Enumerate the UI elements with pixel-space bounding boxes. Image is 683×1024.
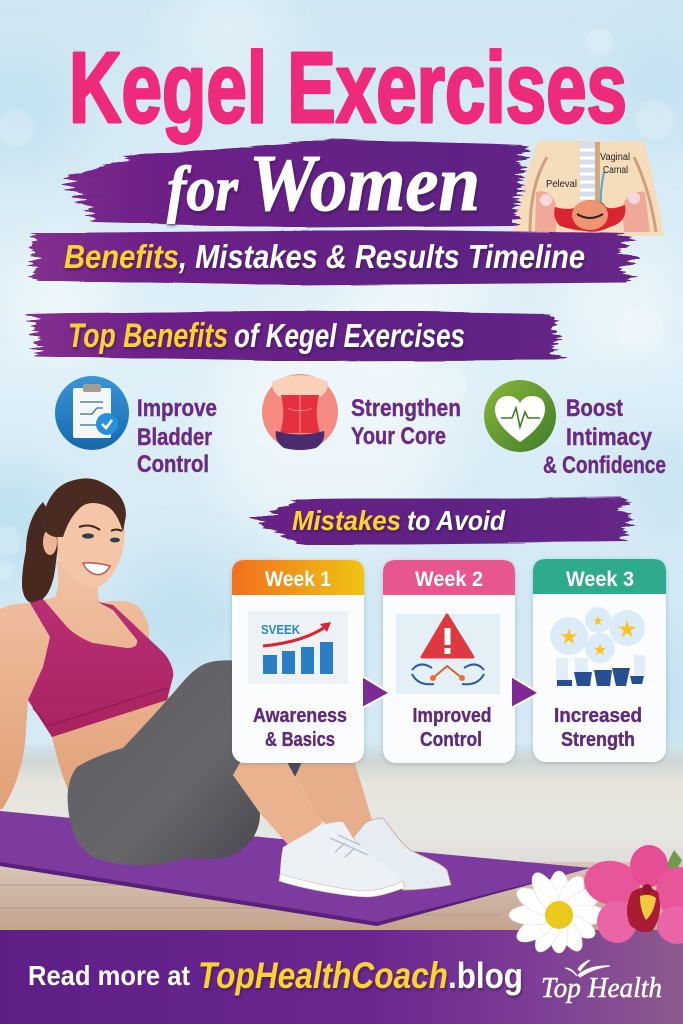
stars icon: ★ xyxy=(617,617,637,643)
card: week 3: Increased xyxy=(554,705,642,727)
card: week 3 xyxy=(533,559,666,762)
banner: subtitle: , Mistakes & Results Timeline xyxy=(178,238,585,275)
anatomy illustration xyxy=(512,141,664,236)
card: week 2 xyxy=(383,560,515,763)
text: Your Core xyxy=(351,423,446,450)
heading: mistakes: Mistakes xyxy=(292,505,401,536)
eyes and brows xyxy=(79,526,122,531)
woman xyxy=(0,478,451,897)
beach horizon and sand xyxy=(0,745,683,875)
heading: top benefits xyxy=(34,310,556,361)
arrow: week 2 to 3 xyxy=(511,676,539,708)
flowers xyxy=(509,845,683,956)
card: week 3: Week 3 xyxy=(566,568,634,591)
warning icon xyxy=(396,614,500,694)
heading: top benefits: of Kegel Exercises xyxy=(234,317,465,354)
anatomy illustration: Vaginal xyxy=(600,152,630,163)
footer link text: Read more at xyxy=(28,960,190,991)
banner: subtitle xyxy=(32,230,630,286)
icon: heart xyxy=(484,380,556,452)
icon: clipboard xyxy=(55,376,129,450)
logo xyxy=(541,960,662,1004)
text xyxy=(543,395,666,479)
card: week 2: Improved xyxy=(412,705,492,727)
footer link text: TopHealthCoach xyxy=(198,955,448,996)
text xyxy=(351,395,461,450)
stars icon: ★ xyxy=(592,614,604,629)
chart icon xyxy=(248,611,348,684)
arrow: week 1 to 2 xyxy=(362,676,390,708)
daisy xyxy=(509,868,607,956)
shoe back xyxy=(353,818,451,890)
card: week 1: & Basics xyxy=(265,729,335,751)
text: Improve xyxy=(137,395,217,422)
ponytail xyxy=(22,502,60,603)
smile xyxy=(83,563,110,575)
card: week 1: Week 1 xyxy=(265,568,331,591)
text: Intimacy xyxy=(566,424,653,451)
face xyxy=(57,502,124,587)
wooden floor xyxy=(0,862,683,934)
chart icon: SVEEK xyxy=(261,622,301,637)
text: Boost xyxy=(566,395,623,422)
icon: torso xyxy=(262,374,338,450)
banner: for Women: Women xyxy=(249,140,480,228)
front calf xyxy=(233,763,322,847)
stars icon: ★ xyxy=(559,625,579,650)
banner: subtitle: Benefits xyxy=(64,238,179,275)
heading: mistakes: to Avoid xyxy=(407,505,506,536)
card: week 2: Week 2 xyxy=(415,568,483,591)
stars icon xyxy=(550,607,645,686)
back leg xyxy=(286,760,372,840)
text: Strengthen xyxy=(351,395,461,422)
banner: for Women xyxy=(66,139,526,228)
weekly timeline xyxy=(232,559,666,763)
shoe front xyxy=(280,822,403,897)
text: Control xyxy=(137,451,209,478)
anatomy illustration: Carnal xyxy=(603,165,628,176)
card: week 3: Strength xyxy=(561,729,635,751)
text: Bladder xyxy=(137,424,212,451)
hair xyxy=(42,478,126,537)
card: week 1: Awareness xyxy=(253,705,347,727)
footer link text: .blog xyxy=(448,955,523,996)
text xyxy=(137,395,217,478)
pink sports top xyxy=(28,599,173,737)
orchid xyxy=(581,845,683,944)
benefit: core xyxy=(262,374,461,450)
arm and torso xyxy=(0,560,170,810)
stars icon: ★ xyxy=(593,640,607,659)
heading: mistakes xyxy=(254,497,630,545)
yoga mat xyxy=(0,811,590,926)
heading: top benefits: Top Benefits xyxy=(68,317,228,355)
card: week 2: Control xyxy=(420,729,482,751)
leggings xyxy=(68,660,260,865)
footer band xyxy=(0,930,683,1024)
benefit: bladder control xyxy=(55,376,217,478)
footer link text xyxy=(28,955,523,996)
benefit: intimacy xyxy=(484,380,666,479)
card: week 1 xyxy=(232,560,364,763)
logo: Top Health xyxy=(541,972,662,1004)
banner: for Women: for xyxy=(167,153,239,224)
anatomy illustration: Peleval xyxy=(546,179,577,190)
